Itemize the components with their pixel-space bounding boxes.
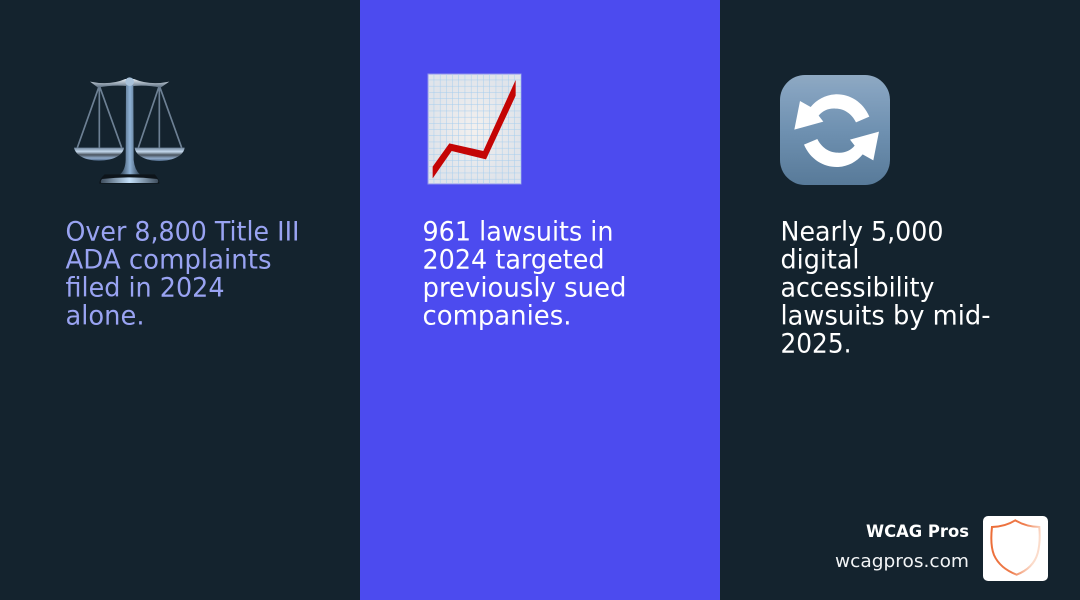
- text: digital lawsuits stat: accessibility: [780, 272, 935, 304]
- brand url: wcagpros.com: [835, 551, 969, 572]
- text: digital lawsuits stat: digital: [780, 244, 860, 276]
- panel: repeat targets: [360, 0, 720, 600]
- icon: balance scale: [74, 77, 185, 184]
- text: complaints stat: [66, 216, 300, 332]
- panel: total complaints: [0, 0, 360, 600]
- panel: digital lawsuits: [720, 0, 1080, 600]
- text: digital lawsuits stat: Nearly 5,000: [780, 216, 944, 248]
- icon: chart increasing: [428, 74, 521, 184]
- logo: shield: [983, 516, 1048, 581]
- text: digital lawsuits stat: lawsuits by mid-: [780, 300, 990, 332]
- text: repeat lawsuits stat: companies.: [422, 300, 572, 332]
- text: repeat lawsuits stat: [422, 216, 626, 332]
- text: complaints stat: Over 8,800 Title III: [66, 216, 300, 248]
- icon: refresh arrows: [780, 75, 890, 185]
- text: complaints stat: alone.: [66, 300, 144, 332]
- text: complaints stat: ADA complaints: [66, 244, 272, 276]
- text: complaints stat: filed in 2024: [66, 272, 224, 304]
- text: digital lawsuits stat: 2025.: [780, 328, 852, 360]
- brand block: [835, 516, 1048, 581]
- text: repeat lawsuits stat: 2024 targeted: [422, 244, 604, 276]
- text: repeat lawsuits stat: previously sued: [422, 272, 626, 304]
- text: digital lawsuits stat: [780, 216, 990, 360]
- brand name: WCAG Pros: [866, 522, 969, 542]
- text: repeat lawsuits stat: 961 lawsuits in: [422, 216, 614, 248]
